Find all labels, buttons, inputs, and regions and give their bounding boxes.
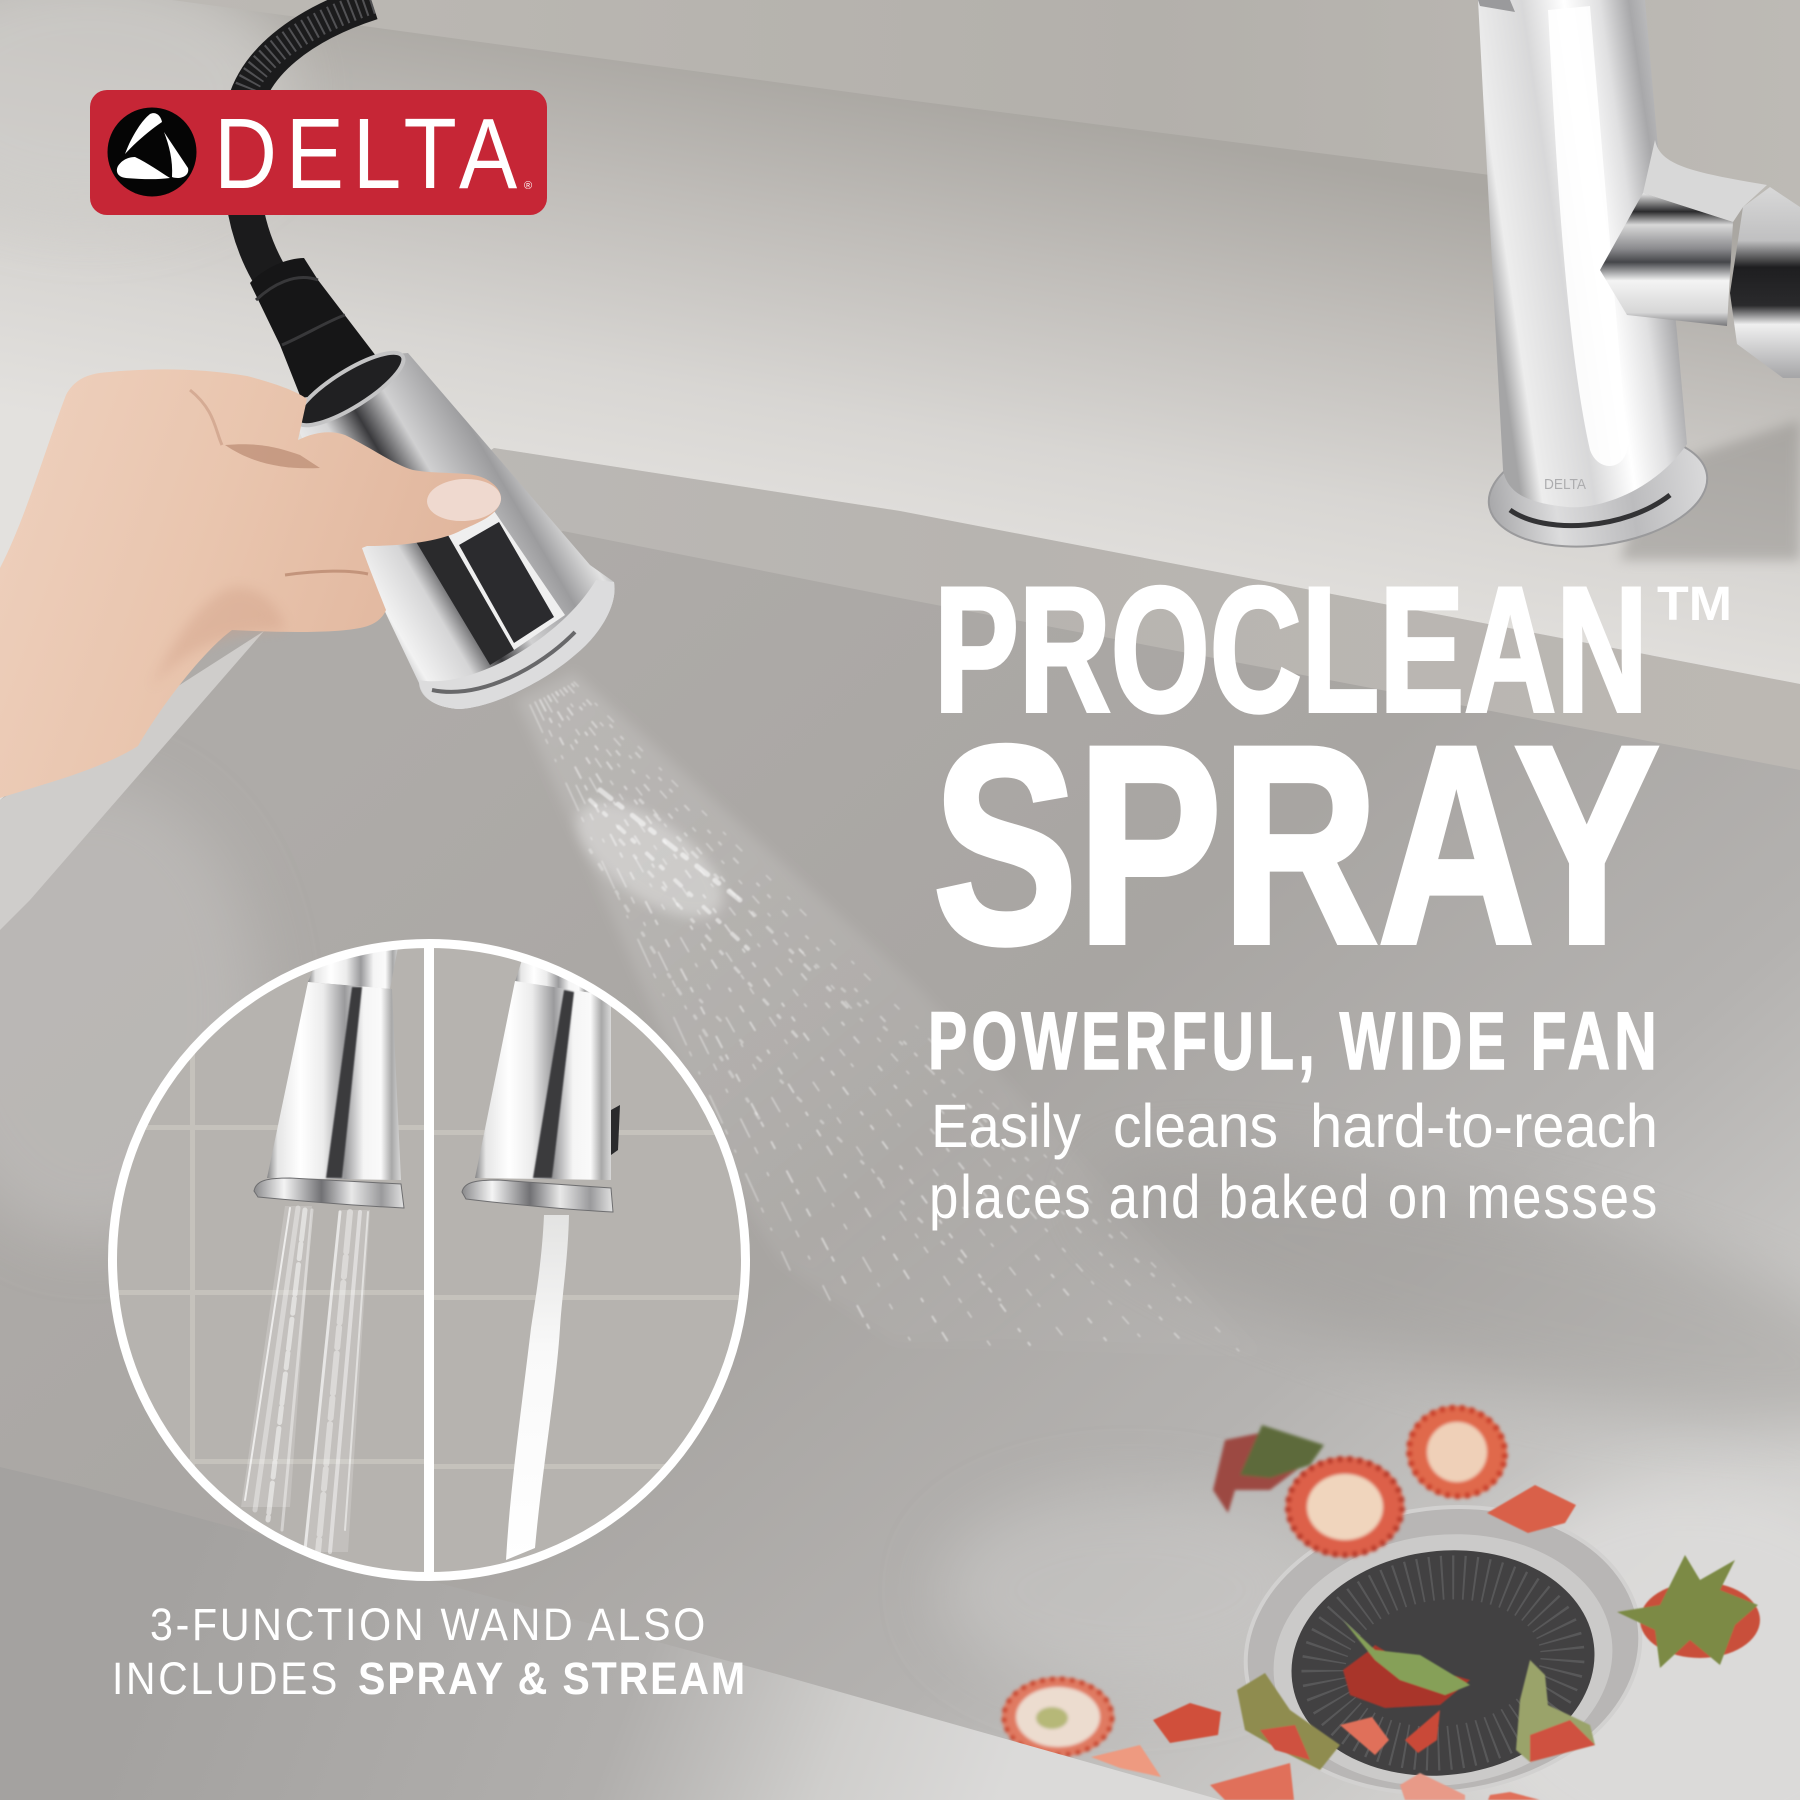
finger creases and shading xyxy=(225,444,320,468)
caption: 3-FUNCTION WAND ALSO xyxy=(150,1599,708,1650)
front sink rim xyxy=(0,1467,1221,1800)
strawberry with leaves xyxy=(1213,1425,1324,1513)
whole strawberry top xyxy=(1617,1555,1760,1668)
left spray nozzle xyxy=(254,942,404,1208)
strawberry wedge xyxy=(1487,1485,1576,1533)
right solid stream xyxy=(506,1215,569,1560)
strawberry slice with core xyxy=(1002,1677,1114,1757)
icon: delta symbol xyxy=(108,108,196,196)
description text: places and baked on messes xyxy=(929,1163,1659,1231)
faucet arm upper xyxy=(1643,140,1767,222)
faucet body xyxy=(1478,0,1687,507)
chrome spray wand xyxy=(288,341,615,709)
spray hose xyxy=(241,2,372,272)
wordmark: DELTA xyxy=(214,98,526,210)
counter deck xyxy=(0,0,1800,800)
caption: INCLUDES xyxy=(112,1653,340,1704)
description text: hard-to-reach xyxy=(1310,1092,1658,1160)
brand logo xyxy=(90,90,547,215)
description text: Easily xyxy=(931,1092,1081,1160)
strawberry slice xyxy=(1399,1397,1515,1507)
chrome faucet xyxy=(1478,0,1800,560)
body highlight xyxy=(1548,6,1628,466)
caption xyxy=(112,1599,747,1704)
rim band xyxy=(200,448,1800,770)
left rim xyxy=(0,631,264,930)
faucet handle xyxy=(1730,187,1800,378)
description text xyxy=(929,1092,1659,1231)
description text: cleans xyxy=(1113,1092,1278,1160)
caption: SPRAY & STREAM xyxy=(358,1653,747,1704)
faucet engraved mark: DELTA xyxy=(1544,476,1586,493)
drain ring xyxy=(1229,1485,1657,1800)
sink left wall glow xyxy=(0,780,260,1240)
back wall xyxy=(172,0,1800,215)
right stream nozzle xyxy=(462,950,620,1212)
soft shadows xyxy=(1620,420,1800,560)
circle outline xyxy=(112,944,746,1576)
lower nozzle ring xyxy=(419,580,615,709)
drain opening xyxy=(1278,1533,1608,1793)
faucet base xyxy=(1481,420,1715,560)
black hose collar xyxy=(250,258,376,398)
registered mark: ® xyxy=(524,180,532,192)
trademark: TM xyxy=(1657,578,1732,631)
title: ProClean Spray xyxy=(933,550,1732,1002)
strawberry slice xyxy=(1286,1457,1404,1557)
upper left deck highlight xyxy=(0,0,290,220)
hand holding wand xyxy=(0,369,502,798)
drain and strawberries xyxy=(1002,1397,1760,1800)
trigger button xyxy=(445,505,565,650)
water spray fan xyxy=(517,672,1262,1354)
inset circle: spray and stream comparison xyxy=(111,942,747,1578)
tile grout xyxy=(118,1054,739,1469)
fingernail xyxy=(426,477,502,523)
center divider xyxy=(424,942,434,1578)
left spray water xyxy=(241,1206,370,1552)
faucet arm xyxy=(1600,193,1733,326)
strawberry pieces xyxy=(1091,1620,1595,1800)
